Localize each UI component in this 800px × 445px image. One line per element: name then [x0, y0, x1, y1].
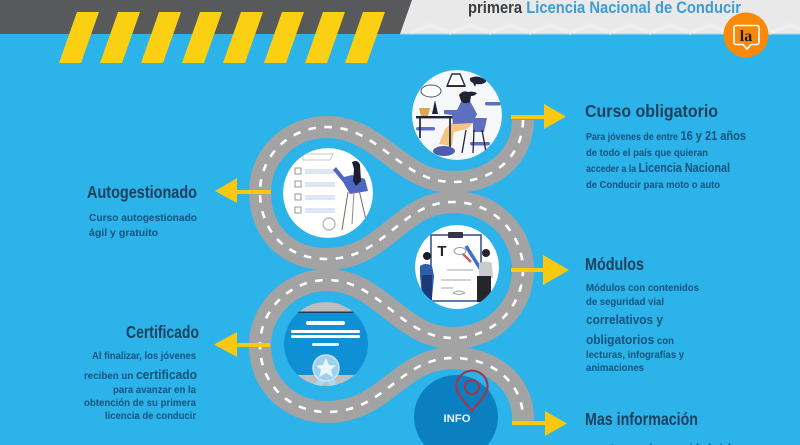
logo badge: la	[740, 28, 752, 45]
text block: curso obligatorio: de Conducir para moto o auto	[586, 179, 720, 191]
text block: autogestionado: Autogestionado	[87, 182, 197, 202]
illustration: certificate	[284, 300, 368, 390]
arrow: modulos	[511, 255, 569, 285]
text block: certificado: Certificado	[126, 322, 199, 342]
info label: INFO	[444, 413, 471, 425]
text block: curso obligatorio	[585, 101, 746, 191]
illustration: document review: T	[437, 243, 447, 260]
text block: autogestionado	[87, 182, 197, 239]
text block: curso obligatorio: de todo el país que quieran	[586, 147, 708, 159]
icon: location pin	[456, 371, 488, 411]
text block: autogestionado: ágil y gratuito	[89, 227, 158, 239]
hazard stripes	[59, 12, 385, 63]
text block: autogestionado: Curso autogestionado	[89, 212, 197, 224]
info circle	[414, 375, 498, 445]
arrow: curso obligatorio	[511, 104, 566, 129]
header band	[0, 0, 800, 34]
text block: mas informacion	[585, 409, 731, 445]
arrow: autogestionado	[215, 178, 271, 203]
text block: modulos: Módulos	[585, 254, 644, 274]
illustration: person at desk	[412, 70, 502, 160]
text block: certificado: obtención de su primera	[84, 397, 196, 409]
text block: curso obligatorio: Para jóvenes de entre 16 y 21 años	[586, 128, 746, 143]
illustration: document review	[415, 225, 499, 309]
text block: curso obligatorio: Curso obligatorio	[585, 101, 718, 121]
text block: curso obligatorio: acceder a la Licencia Nacional	[586, 160, 730, 175]
text block: certificado	[84, 322, 199, 422]
road	[260, 120, 523, 423]
text block: modulos: Módulos con contenidos	[586, 282, 699, 294]
text block: modulos: lecturas, infografías y	[586, 349, 684, 361]
text block: certificado: licencia de conducir	[105, 410, 196, 422]
text block: modulos: animaciones	[586, 362, 644, 374]
text block: certificado: para avanzar en la	[113, 384, 196, 396]
text block: modulos	[585, 254, 699, 374]
text block: certificado: Al finalizar, los jóvenes	[92, 350, 196, 362]
text block: modulos: correlativos y	[586, 312, 664, 327]
text block: modulos: obligatorios con	[586, 332, 674, 347]
text block: modulos: de seguridad vial	[586, 296, 664, 308]
illustration: checklist	[283, 148, 373, 238]
text block: mas informacion: Mas información	[585, 409, 698, 429]
text block: certificado: reciben un certificado	[84, 367, 197, 382]
arrow: certificado	[214, 332, 270, 357]
arrow: mas informacion	[512, 411, 567, 436]
logo badge	[724, 12, 768, 58]
